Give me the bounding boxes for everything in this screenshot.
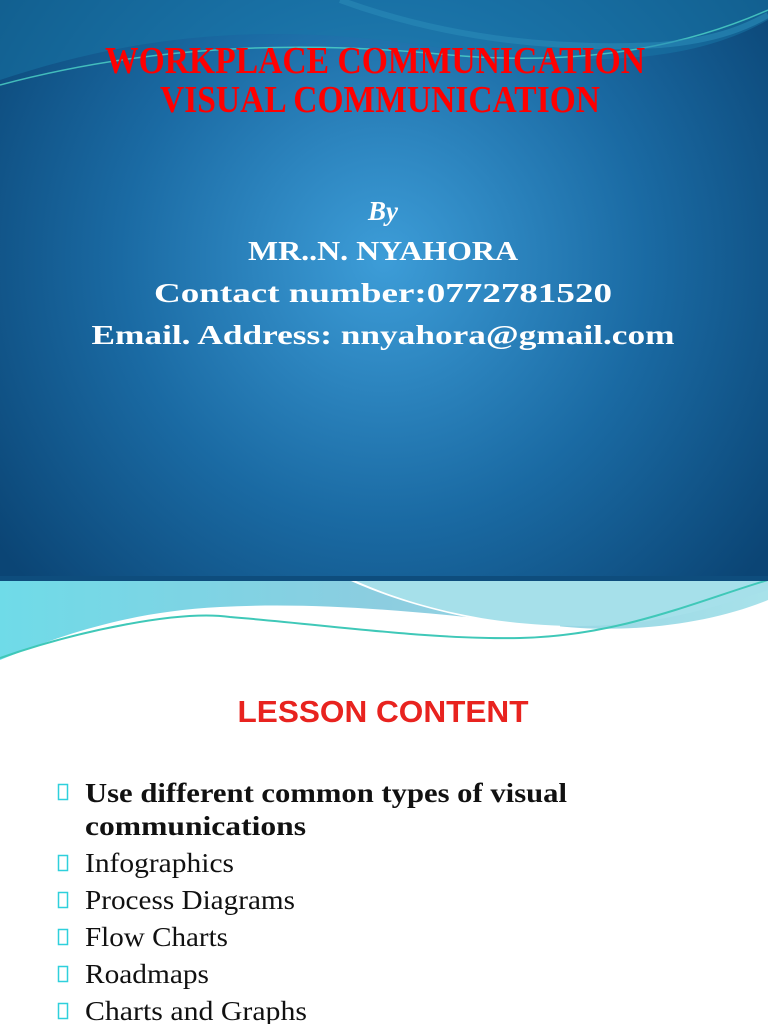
author details: Email. Address: nnyahora@gmail.com: [92, 320, 675, 350]
title: WORKPLACE COMMUNICATION: [105, 40, 645, 82]
bullet list: communications: [85, 811, 306, 841]
bullet list: Infographics: [85, 848, 234, 878]
heading: lesson content: LESSON CONTENT: [238, 694, 529, 729]
author details: MR..N. NYAHORA: [248, 236, 519, 266]
author details: [92, 196, 675, 350]
author details: Contact number:0772781520: [154, 278, 612, 308]
panel: lesson content slide: [0, 576, 768, 1024]
bullet list: Flow Charts: [85, 922, 228, 952]
bullet list: Process Diagrams: [85, 885, 295, 915]
author details: By: [367, 196, 399, 226]
title: [105, 40, 645, 121]
title: VISUAL COMMUNICATION: [160, 79, 600, 121]
bullet list: Use different common types of visual: [85, 778, 568, 808]
bullet list: [58, 778, 568, 1024]
bullet list: Roadmaps: [85, 959, 209, 989]
wave header: [0, 576, 768, 666]
panel: title slide: [0, 0, 768, 576]
